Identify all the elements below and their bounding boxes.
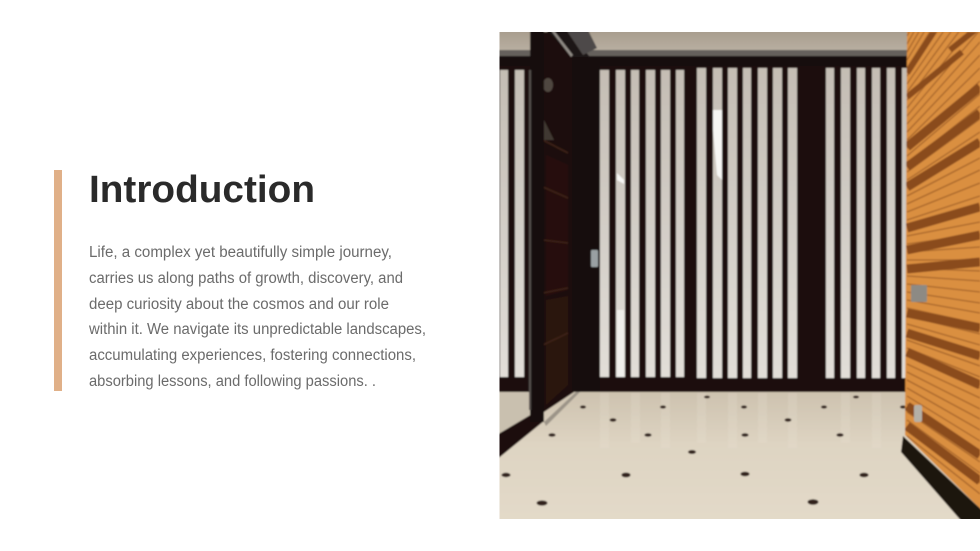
door frame bottom	[500, 414, 543, 458]
dark slatted wall	[495, 66, 909, 392]
body paragraph: deep curiosity about the cosmos and our role	[89, 296, 389, 313]
body paragraph: within it. We navigate its unpredictable landscapes,	[88, 321, 426, 338]
wall switch	[911, 285, 927, 302]
left mirror panel	[500, 405, 531, 434]
ceiling beam	[546, 32, 598, 58]
white slats	[500, 68, 907, 378]
floor reflections	[600, 393, 881, 448]
shelving unit	[543, 32, 574, 412]
body paragraph: Life, a complex yet beautifully simple journey,	[89, 244, 392, 261]
door frame post	[530, 28, 544, 422]
floor	[495, 392, 980, 524]
body paragraph: absorbing lessons, and following passions. .	[89, 373, 376, 390]
wall outlet	[914, 405, 922, 422]
body paragraph	[88, 244, 426, 390]
body paragraph: carries us along paths of growth, discovery, and	[89, 270, 403, 287]
door handle	[591, 250, 598, 267]
glass reflections	[617, 110, 722, 377]
floor diamonds	[501, 396, 906, 506]
skirting board	[901, 436, 980, 524]
title: Introduction	[89, 169, 315, 211]
dark door post	[572, 56, 600, 392]
body paragraph: accumulating experiences, fostering connections,	[89, 347, 416, 364]
orange wall	[905, 0, 980, 513]
ceiling	[500, 32, 908, 68]
accent bar	[54, 170, 62, 391]
photo: interior room with slatted wall	[495, 0, 980, 524]
threshold	[544, 392, 580, 426]
